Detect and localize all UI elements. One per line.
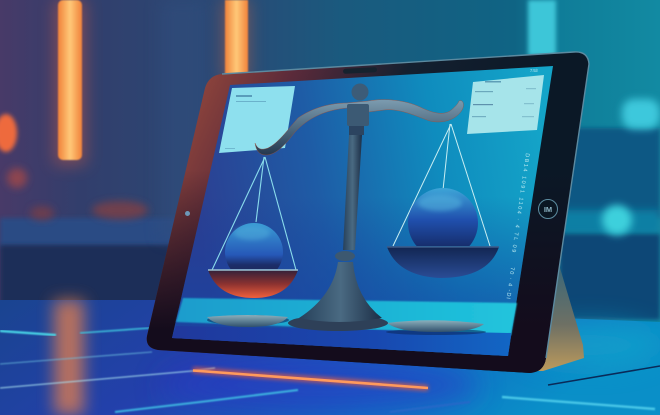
orange neon bar left: [54, 0, 86, 165]
orange floor light line: [193, 370, 428, 388]
scale strings left: [212, 157, 296, 270]
tablet stand: [525, 268, 584, 371]
vertical screen caption: DB14 1091 1104 · 4 TL 09: [510, 153, 530, 253]
scale finial: [352, 84, 368, 100]
front camera dot: [185, 211, 190, 216]
tablet body: [147, 52, 589, 373]
tablet: [147, 52, 589, 373]
screen: [172, 66, 553, 356]
status bar text: 7:53: [530, 68, 539, 73]
orange neon bar centre: [222, 0, 250, 80]
shelf band on screen: [176, 298, 517, 335]
scale hub: [347, 104, 369, 126]
scale post: [335, 125, 364, 261]
vertical screen caption lower: 70 · 4 -DI: [505, 267, 515, 300]
ledge band on screen: [172, 326, 511, 356]
background wall: [0, 0, 660, 322]
scale base: [288, 262, 388, 331]
right info card: [467, 75, 544, 134]
tablet lower shade: [147, 52, 589, 373]
left pan: [208, 270, 298, 298]
left plate: [207, 315, 289, 327]
left ball: [225, 223, 283, 269]
right pan: [387, 247, 499, 278]
scale beam: [255, 100, 463, 155]
cyan light bar top right: [528, 0, 556, 56]
camera notch: [343, 67, 377, 74]
cyan glowing dot right: [602, 205, 632, 235]
reflective floor: [0, 300, 660, 415]
home button: [538, 200, 558, 218]
blurred red lights left: [0, 114, 148, 220]
home button: IM: [544, 205, 552, 214]
cyan glowing pill right: [622, 99, 660, 129]
right plate: [386, 320, 486, 335]
balance scale: [208, 84, 499, 331]
floor light lines: [0, 328, 660, 412]
plates on shelf: [207, 315, 486, 335]
scale strings right: [393, 124, 490, 246]
left info card: [219, 86, 295, 153]
tablet edge highlights: [222, 52, 589, 358]
right ball: [408, 188, 478, 246]
